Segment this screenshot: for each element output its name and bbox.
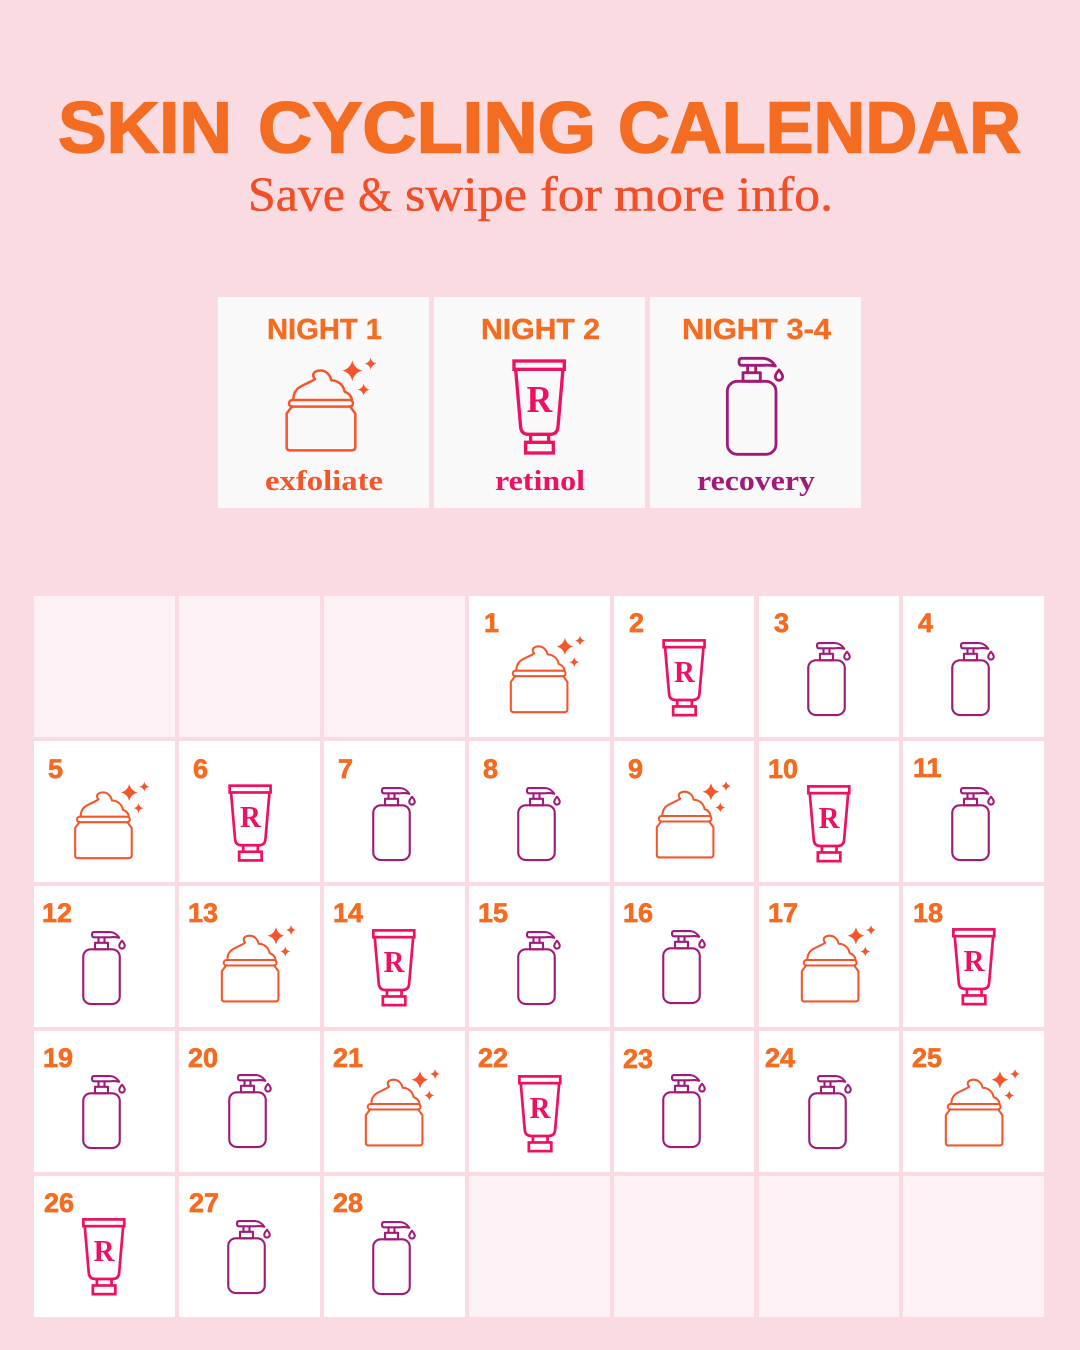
icon: retinol tube: R: [527, 379, 553, 421]
day 18: R: [964, 943, 985, 978]
icon: pump bottle: [727, 358, 783, 454]
title: CYCLING: [258, 89, 596, 169]
title: CALENDAR: [618, 89, 1021, 169]
day 7: 7: [338, 754, 353, 784]
day 27: 27: [189, 1188, 219, 1218]
panel: night 2 retinol: [434, 297, 645, 508]
day 15: [469, 886, 610, 1027]
day 17: [759, 886, 899, 1027]
day 16: [614, 886, 754, 1027]
subtitle: for: [540, 167, 602, 222]
day 20: 20: [188, 1043, 218, 1073]
day 6: R: [240, 799, 261, 834]
day 9: [614, 741, 754, 882]
day 5: 5: [48, 754, 63, 784]
day 16: 16: [623, 898, 653, 928]
icon: retinol tube: [514, 361, 564, 453]
day 19: 19: [43, 1043, 73, 1073]
day 3: 3: [774, 608, 789, 638]
subtitle: [248, 167, 833, 222]
title: [58, 89, 1021, 169]
subtitle: &: [358, 167, 392, 222]
day 2: [614, 596, 754, 737]
day 11: [903, 741, 1044, 882]
day 6: 6: [193, 754, 208, 784]
empty cells: [34, 596, 1044, 1317]
calendar grid: [34, 596, 1044, 1317]
label: retinol: retinol: [495, 465, 585, 497]
day 4: [903, 596, 1044, 737]
day 21: [324, 1031, 465, 1172]
heading: night 2: NIGHT 2: [481, 314, 600, 346]
day 14: R: [384, 944, 405, 979]
label: recovery: recovery: [697, 465, 816, 497]
day 1: [469, 596, 610, 737]
day 22: [469, 1031, 610, 1172]
day 10: 10: [768, 754, 798, 784]
title: SKIN: [58, 89, 232, 169]
label: exfoliate: exfoliate: [265, 465, 383, 497]
day 19: [34, 1031, 175, 1172]
day 27: [179, 1176, 320, 1317]
subtitle: swipe: [405, 167, 527, 222]
heading: night 1: NIGHT 1: [267, 314, 382, 346]
day 12: 12: [42, 898, 72, 928]
day 28: [324, 1176, 465, 1317]
day 10: R: [819, 800, 840, 835]
subtitle: info.: [737, 167, 833, 222]
day 1: 1: [484, 608, 499, 638]
day 25: [903, 1031, 1044, 1172]
day 11: 11: [913, 753, 942, 783]
day 26: R: [94, 1233, 115, 1268]
day 26: 26: [44, 1188, 74, 1218]
day 10: [759, 741, 899, 882]
panel: night 1 exfoliate: [218, 297, 429, 508]
day 25: 25: [912, 1043, 942, 1073]
day 8: 8: [483, 754, 498, 784]
day 3: [759, 596, 899, 737]
day 24: [759, 1031, 899, 1172]
day 26: [34, 1176, 175, 1317]
day 23: 23: [623, 1044, 653, 1074]
day 22: 22: [478, 1043, 508, 1073]
day 8: [469, 741, 610, 882]
day 9: 9: [628, 754, 643, 784]
subtitle: Save: [248, 167, 345, 222]
day 6: [179, 741, 320, 882]
day 28: 28: [333, 1188, 363, 1218]
heading: night 3-4: NIGHT 3-4: [682, 314, 831, 346]
day 13: 13: [188, 898, 218, 928]
day 18: [903, 886, 1044, 1027]
day 7: [324, 741, 465, 882]
panel: night 3-4 recovery: [650, 297, 861, 508]
day 20: [179, 1031, 320, 1172]
day 14: [324, 886, 465, 1027]
day 14: 14: [333, 898, 363, 928]
day 2: 2: [629, 608, 644, 638]
day 13: [179, 886, 320, 1027]
day 4: 4: [918, 608, 933, 638]
day 5: [34, 741, 175, 882]
day 18: 18: [913, 898, 943, 928]
day 15: 15: [478, 898, 508, 928]
day 17: 17: [768, 898, 798, 928]
day 21: 21: [333, 1043, 363, 1073]
day 24: 24: [765, 1043, 795, 1073]
day 22: R: [530, 1090, 551, 1125]
day 23: [614, 1031, 754, 1172]
subtitle: more: [614, 167, 725, 222]
day 12: [34, 886, 175, 1027]
day 2: R: [674, 654, 695, 689]
icon: cream jar with sparkles: [287, 358, 377, 450]
